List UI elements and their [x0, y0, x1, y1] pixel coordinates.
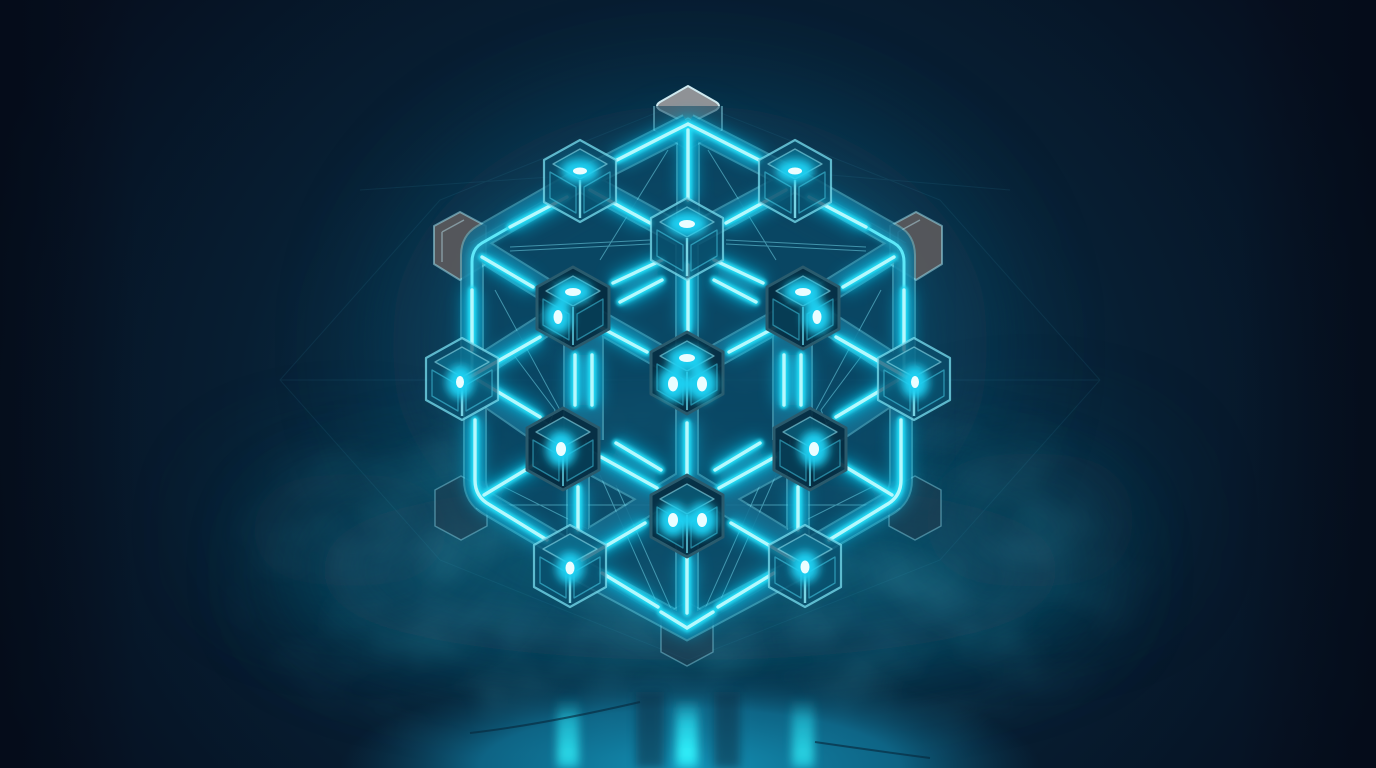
floor reflection — [330, 670, 1050, 768]
neon light cores — [470, 124, 906, 628]
neon light glow — [470, 124, 906, 628]
glass tubes — [462, 125, 914, 628]
node hot spots — [456, 168, 919, 574]
fog behind and beneath the cube — [233, 86, 1153, 720]
thin tension wires — [470, 118, 906, 632]
cube interior tint — [470, 118, 906, 628]
faint construction lines — [280, 100, 1100, 660]
lattice nodes — [426, 140, 950, 607]
silver corner caps — [434, 86, 942, 666]
node light halos — [446, 159, 929, 584]
